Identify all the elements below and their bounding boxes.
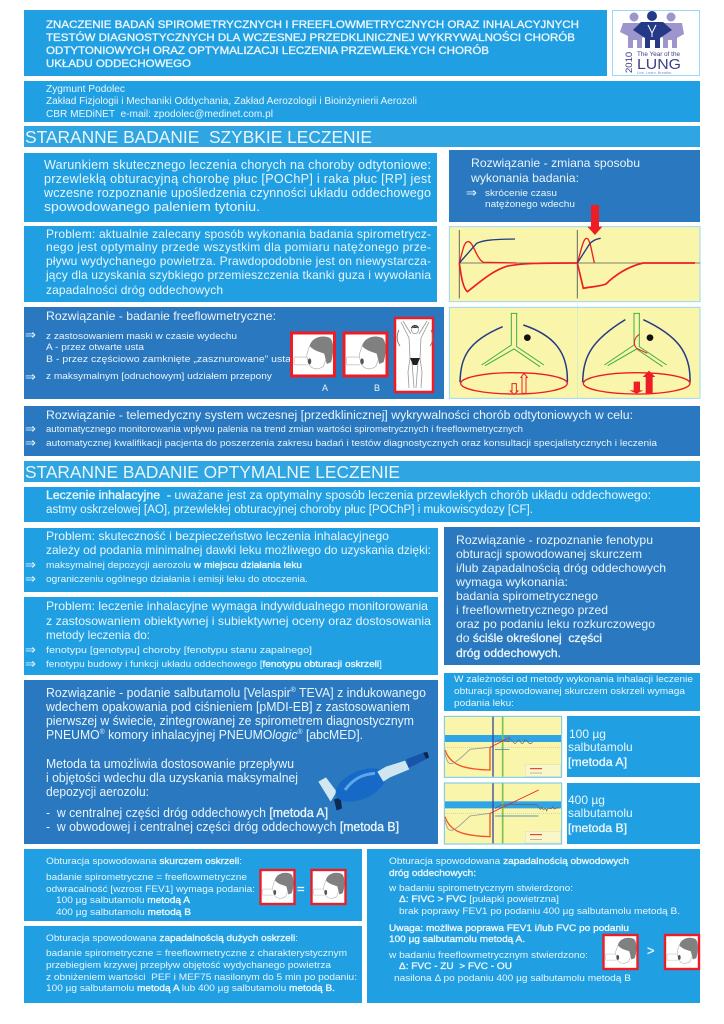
title panel: UKŁADU ODDECHOWEGO — [46, 58, 191, 70]
panel: phenotype solution: Rozwiązanie - rozpoznanie fenotypu — [456, 533, 653, 547]
panel: phenotype solution: i freeflowmetrycznego przed — [456, 603, 608, 617]
panel: peripheral airway collapse: nasilona Δ po podaniu 400 µg salbutamolu metodą B — [394, 973, 631, 984]
panel: depending on method: obturacji spowodowanej skurczem oskrzeli wymaga — [454, 686, 686, 697]
panel: peripheral airway collapse: Δ: FVC - ZU > FVC - OU — [399, 961, 512, 972]
logo: The Year of the Lung — [612, 10, 700, 76]
panel: telemedicine solution: automatycznej kwalifikacji pacjenta do poszerzenia zakresu badań i testów diagnostycznych oraz konsultacji specjalistycznych i leczenia — [46, 438, 657, 448]
panel: problem monitoring: z zastosowaniem obiektywnej i subiektywnej oceny oraz dostosowania — [46, 614, 431, 628]
panel: problem dose: ⇒ — [25, 571, 36, 586]
panel: peripheral airway collapse: 100 µg salbutamolu metodą A. — [389, 934, 525, 945]
panel: bronchospasm obstruction — [24, 849, 362, 921]
title panel: ZNACZENIE BADAŃ SPIROMETRYCZNYCH I FREEFLOWMETRYCZNYCH ORAZ INHALACYJNYCH — [46, 18, 579, 31]
authors panel — [24, 81, 700, 122]
panel: problem: nego jest optymalny przede wszystkim dla pomiaru natężonego prze- — [46, 240, 431, 254]
chart: method B — [444, 783, 562, 844]
panel: bronchospasm obstruction: = — [297, 881, 305, 896]
panel: introduction: wczesne rozpoznanie upośledzenia czynności układu oddechowego — [43, 186, 431, 200]
authors panel: CBR MEDiNET e-mail: zpodolec@medinet.com.pl — [46, 109, 273, 120]
panel: peripheral airway collapse: brak poprawy FEV1 po podaniu 400 µg salbutamolu metodą B. — [399, 906, 680, 917]
logo: The Year of the Lung: Live. Learn. Breathe. — [637, 71, 672, 75]
panel: problem dose: ograniczeniu ogólnego działania i emisji leku do otoczenia. — [46, 574, 308, 584]
panel: inhalation treatment: Leczenie inhalacyjne - uważane jest za optymalny sposób leczenia przewlekłych chorób układu oddechowego: — [46, 490, 651, 502]
authors panel: Zygmunt Podolec — [46, 84, 125, 95]
panel: bronchospasm obstruction: 400 µg salbutamolu metodą B — [56, 907, 191, 918]
panel: salbutamol solution: pierwszej w świecie, zintegrowanej ze spirometrem diagnostycznym — [46, 714, 414, 728]
icon: face A — [292, 333, 334, 376]
panel: problem dose: Problem: skuteczność i bezpieczeństwo leczenia inhalacyjnego — [46, 529, 389, 543]
panel: telemedicine solution — [24, 406, 700, 456]
panel: peripheral airway collapse: Uwaga: możliwa poprawa FEV1 i/lub FVC po podaniu — [389, 923, 629, 934]
panel: peripheral airway collapse: dróg oddechowych: — [389, 868, 476, 879]
authors panel: Zakład Fizjologii i Mechaniki Oddychania, Zakład Aerozologii i Bioinżynierii Aerozoli — [46, 96, 417, 107]
panel: salbutamol solution — [24, 680, 438, 844]
panel: freeflowmetric solution: B — [374, 383, 380, 393]
panel: phenotype solution: obturacji spowodowanej skurczem — [456, 547, 642, 561]
panel: salbutamol solution: [abcMED]. — [303, 728, 363, 742]
panel: phenotype solution — [444, 527, 700, 665]
panel: solution change of method: ⇒ — [466, 185, 477, 200]
panel: salbutamol solution: i objętości wdechu dla uzyskania maksymalnej — [46, 771, 298, 785]
icon: inhaler — [318, 752, 429, 811]
icon: face B — [344, 333, 387, 376]
heading: section 1: STARANNE BADANIE SZYBKIE LECZENIE — [25, 127, 372, 147]
panel: 100 µg method A: [metoda A] — [568, 755, 627, 769]
panel: bronchospasm obstruction: Obturacja spowodowana skurczem oskrzeli : — [46, 856, 242, 867]
panel: problem monitoring: fenotypu [genotypu] choroby [fenotypu stanu zapalnego] — [46, 645, 312, 655]
panel: problem: zapadalności dróg oddechowych — [46, 283, 223, 297]
panel: salbutamol solution: logic — [272, 728, 298, 742]
icon: body figure — [395, 318, 433, 392]
panel: large bronchi collapse — [24, 926, 362, 1003]
panel: problem monitoring: metody leczenia do: — [46, 628, 150, 642]
panel: peripheral airway collapse: w badaniu freeflowmetrycznym stwierdzono: — [388, 950, 588, 961]
panel: peripheral airway collapse: Δ: FIVC > FVC [pułapki powietrzna] — [399, 894, 559, 905]
panel: problem dose: maksymalnej depozycji aerozolu w miejscu działania leku — [46, 560, 302, 570]
panel: telemedicine solution: Rozwiązanie - telemedyczny system wczesnej [przedklinicznej] wykrywalności chorób odtytoniowych w celu: — [46, 410, 633, 422]
panel: freeflowmetric solution: ⇒ — [25, 327, 36, 342]
panel: problem: jący dla uzyskania szybkiego przemieszczenia tkanki guza i wywołania — [45, 268, 431, 282]
panel: salbutamol solution: TEVA] z indukowanego — [296, 686, 426, 700]
chart: lungs diagrams — [449, 303, 700, 398]
panel: large bronchi collapse: badanie spirometryczne = freeflowmetryczne z charakterystycznym — [46, 948, 347, 959]
panel: salbutamol solution: PNEUMO — [46, 728, 101, 742]
panel: introduction: Warunkiem skutecznego leczenia chorych na choroby odtytoniowe: — [44, 158, 431, 172]
panel: peripheral airway collapse: Obturacja spowodowana zapadalnością obwodowych — [389, 856, 629, 867]
panel: salbutamol solution: komory inhalacyjnej PNEUMO — [105, 728, 273, 742]
panel: salbutamol solution: Rozwiązanie - podanie salbutamolu [Velaspir — [46, 686, 295, 700]
panel: freeflowmetric solution: z zastosowaniem maski w czasie wydechu — [46, 331, 237, 342]
panel: 400 µg method B: [metoda B] — [568, 821, 627, 835]
heading: section 2 — [24, 461, 700, 482]
panel: phenotype solution: i/lub zapadalnością dróg oddechowych — [456, 561, 666, 575]
chart: flow volume curves — [449, 227, 700, 302]
panel: problem dose: ⇒ — [25, 557, 36, 572]
panel: phenotype solution: do ściśle określonej części — [456, 631, 602, 645]
panel: 400 µg method B — [567, 783, 700, 844]
heading: section 1 — [24, 126, 700, 147]
panel: large bronchi collapse: 100 µg salbutamolu metodą A lub 400 µg salbutamolu metodą B. — [46, 983, 335, 994]
panel: 400 µg method B: 400 µg — [568, 793, 605, 807]
panel: large bronchi collapse: z obniżeniem wartości PEF i MEF75 nasilonym do 5 min po podaniu: — [46, 972, 357, 983]
panel: problem: pływu wydychanego powietrza. Prawdopodobnie jest on niewystarcza- — [46, 254, 431, 268]
panel: introduction: przewlekłą obturacyjną chorobę płuc [POChP] i raka płuc [RP] jest — [44, 172, 432, 186]
arrow: red down arrow — [587, 205, 602, 235]
panel: large bronchi collapse: przebiegiem krzywej przepływ objętość wydychanego powietrza — [46, 960, 332, 971]
panel: peripheral airway collapse — [367, 849, 700, 1003]
logo: The Year of the Lung: The Year of the — [637, 52, 681, 58]
panel: freeflowmetric solution: B - przez częściowo zamknięte „zasznurowane” usta — [46, 354, 292, 365]
panel: solution change of method — [449, 150, 700, 222]
title panel: TESTÓW DIAGNOSTYCZNYCH DLA WCZESNEJ PRZEDKLINICZNEJ WYKRYWALNOŚCI CHORÓB — [46, 31, 575, 44]
panel: depending on method — [444, 673, 700, 711]
icon: face B — [604, 935, 638, 969]
panel: phenotype solution: wymaga wykonania: — [455, 575, 568, 589]
panel: introduction — [24, 153, 437, 222]
panel: salbutamol solution: depozycji aerozolu: — [46, 785, 149, 799]
panel: salbutamol solution: ® — [100, 728, 105, 736]
panel: inhalation treatment: astmy oskrzelowej [AO], przewlekłej obturacyjnej choroby płuc [POChP] i mukowiscydozy [CF]. — [46, 504, 533, 516]
icon: face B — [312, 870, 346, 904]
panel: large bronchi collapse: Obturacja spowodowana zapadalnością dużych oskrzeli : — [46, 933, 298, 944]
panel: salbutamol solution: - w centralnej części dróg oddechowych [metoda A] — [46, 806, 328, 820]
panel: problem dose — [24, 528, 438, 592]
panel: 100 µg method A: salbutamolu — [568, 740, 633, 754]
panel: freeflowmetric solution: z maksymalnym [odruchowym] udziałem przepony — [46, 371, 272, 382]
panel: depending on method: podania leku: — [454, 698, 514, 709]
panel: problem monitoring: fenotypu budowy i funkcji układu oddechowego [ fenotypu obturacji oskrzeli ] — [46, 659, 382, 669]
panel: freeflowmetric solution: A - przez otwarte usta — [46, 342, 145, 353]
panel: salbutamol solution: ® — [291, 686, 297, 694]
panel: solution change of method: skrócenie czasu — [485, 188, 557, 198]
panel: salbutamol solution: - w obwodowej i centralnej części dróg oddechowych [metoda B] — [46, 820, 399, 834]
panel: introduction: spowodowanego paleniem tytoniu. — [44, 200, 260, 214]
panel: freeflowmetric solution: ⇒ — [25, 369, 36, 384]
panel: telemedicine solution: ⇒ — [25, 435, 36, 450]
panel: depending on method: W zależności od metody wykonania inhalacji leczenie — [454, 674, 693, 685]
panel: telemedicine solution: automatycznego monitorowania wpływu palenia na trend zmian wartości spirometrycznych i freeflowmetrycznych — [46, 424, 523, 434]
logo: The Year of the Lung: LUNG — [637, 56, 681, 73]
icon: face A — [260, 870, 294, 904]
panel: problem monitoring: ⇒ — [25, 642, 36, 657]
panel: inhalation treatment — [24, 487, 700, 522]
panel: problem: Problem: aktualnie zalecany sposób wykonania badania spirometrycz- — [46, 227, 431, 241]
panel: freeflowmetric solution — [24, 307, 444, 399]
panel: problem monitoring: ⇒ — [25, 656, 36, 671]
icon: face A — [665, 935, 699, 969]
title panel — [24, 10, 607, 76]
panel: problem monitoring: Problem: leczenie inhalacyjne wymaga indywidualnego monitorowania — [46, 599, 428, 613]
panel: 100 µg method A: 100 µg — [569, 727, 606, 741]
title panel: ODTYTONIOWYCH ORAZ OPTYMALIZACJI LECZENIA PRZEWLEKŁYCH CHORÓB — [46, 44, 489, 57]
panel: bronchospasm obstruction: badanie spirometryczne = freeflowmetryczne — [46, 872, 247, 883]
panel: peripheral airway collapse: w badaniu spirometrycznym stwierdzono: — [388, 883, 573, 894]
panel: 100 µg method A — [567, 716, 700, 777]
panel: telemedicine solution: ⇒ — [25, 421, 36, 436]
panel: salbutamol solution: ® — [298, 728, 303, 736]
panel: phenotype solution: badania spirometrycznego — [456, 589, 598, 603]
panel: solution change of method: Rozwiązanie - zmiana sposobu — [471, 156, 640, 170]
panel: freeflowmetric solution: Rozwiązanie - badanie freeflowmetryczne: — [46, 309, 276, 323]
panel: salbutamol solution: Metoda ta umożliwia dostosowanie przepływu — [46, 757, 294, 771]
panel: bronchospasm obstruction: 100 µg salbutamolu metodą A — [56, 895, 191, 906]
panel: freeflowmetric solution: A — [322, 383, 328, 393]
heading: section 2: STARANNE BADANIE OPTYMALNE LECZENIE — [25, 462, 400, 482]
panel: salbutamol solution: wdechem opakowania pod ciśnieniem [pMDI-EB] z zastosowaniem — [45, 700, 410, 714]
panel: problem monitoring — [24, 597, 438, 675]
panel: 400 µg method B: salbutamolu — [568, 806, 633, 820]
panel: solution change of method: natężonego wdechu — [485, 199, 575, 209]
panel: phenotype solution: dróg oddechowych. — [456, 646, 561, 660]
logo: The Year of the Lung: 2010 — [624, 52, 635, 73]
panel: problem — [24, 226, 437, 302]
panel: phenotype solution: oraz po podaniu leku rozkurczowego — [456, 617, 655, 631]
panel: solution change of method: wykonania badania: — [470, 171, 579, 185]
panel: bronchospasm obstruction: odwracalność [wzrost FEV1] wymaga podania: — [46, 884, 255, 895]
panel: problem dose: zależy od podania minimalnej dawki leku możliwego do uzyskania dzięki: — [46, 543, 431, 557]
chart: method A — [444, 716, 562, 777]
panel: peripheral airway collapse: > — [647, 943, 655, 958]
